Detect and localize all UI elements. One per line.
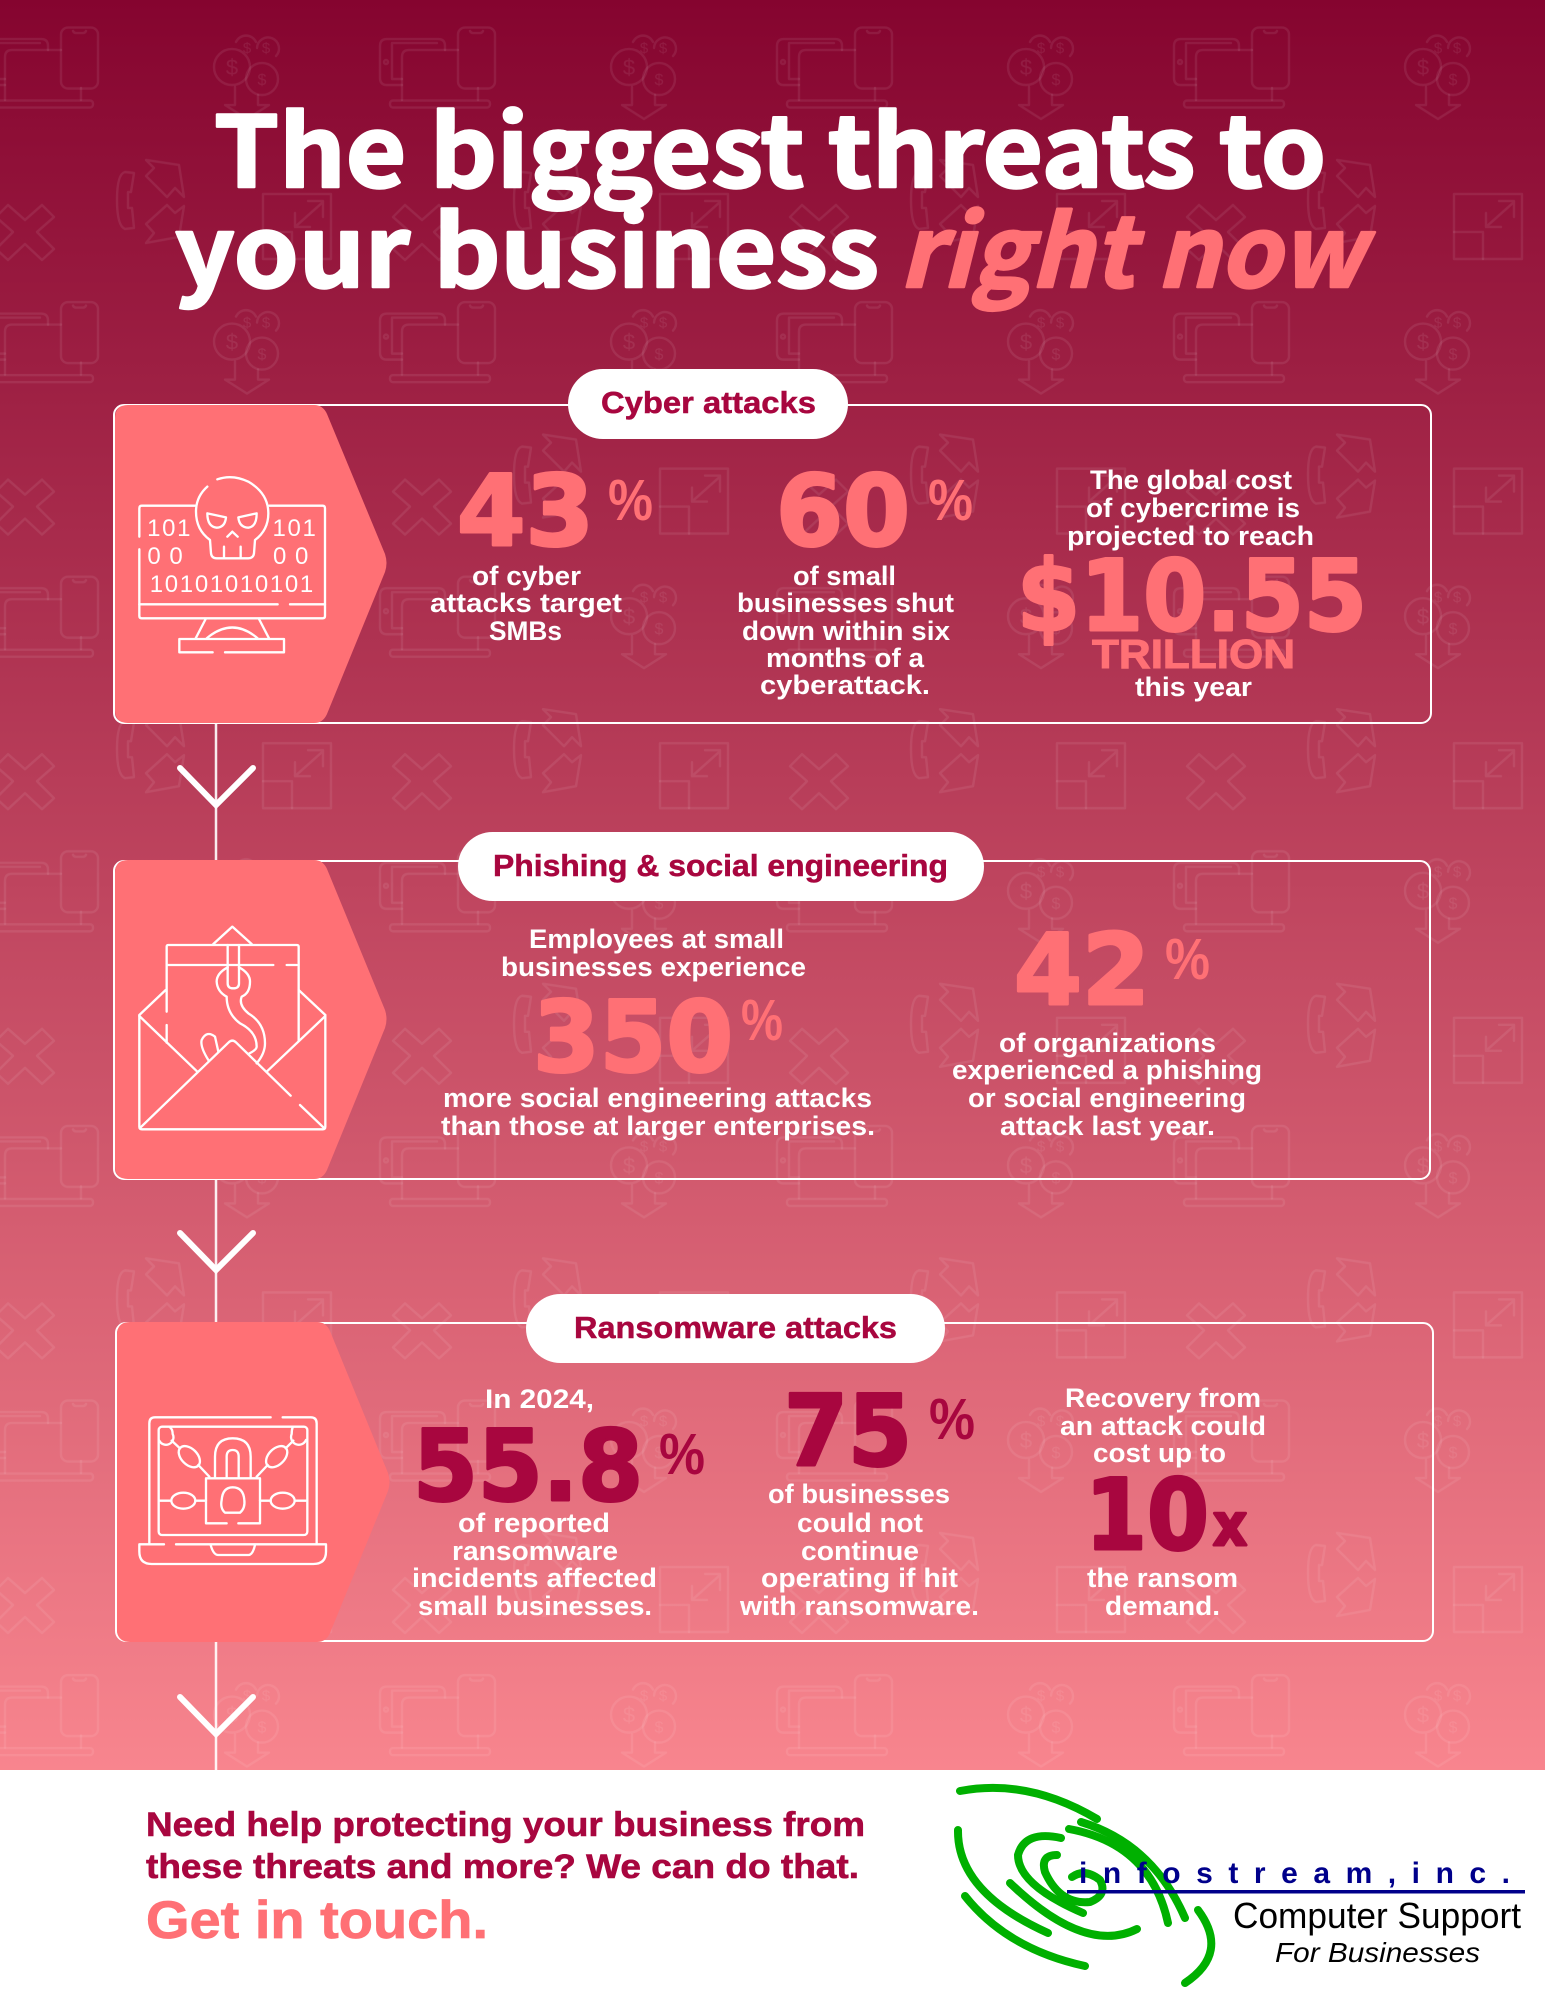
stat: 10x: an attack could	[1060, 1411, 1266, 1441]
icon: skull on computer monitor: 101	[272, 515, 318, 542]
stat: 55.8%: of reported	[458, 1508, 610, 1538]
logo wordmark: infostream,inc.	[1079, 1857, 1510, 1890]
icon: laptop with padlock	[139, 1417, 326, 1564]
stat: $10.55 trillion: projected to reach	[1067, 521, 1314, 551]
logo tagline	[1233, 1895, 1521, 1968]
stat: 60%	[737, 455, 973, 700]
stat: 10x: Recovery from	[1065, 1383, 1261, 1413]
stat: 55.8%: small businesses.	[418, 1591, 652, 1621]
stat: 350%: businesses experience	[501, 952, 806, 982]
stat: 42%: 42	[1014, 914, 1150, 1028]
stat: 350%: %	[741, 988, 783, 1053]
stat: $10.55 trillion	[1017, 465, 1367, 702]
heading pill: Ransomware attacks	[526, 1294, 945, 1363]
stat: 75%: operating if hit	[761, 1563, 958, 1593]
stat: 350%: than those at larger enterprises.	[441, 1111, 875, 1141]
panel: ransomware attacks	[116, 1294, 1433, 1642]
call to action	[146, 1806, 865, 1950]
stat: 60%: months of a	[766, 643, 925, 673]
stat: $10.55 trillion: The global cost	[1090, 465, 1292, 495]
stat: 10x: demand.	[1105, 1591, 1220, 1621]
stat: 42%	[952, 914, 1262, 1141]
stat: 60%: cyberattack.	[760, 670, 930, 700]
coral arrow tab	[115, 405, 386, 723]
call to action: Need help protecting your business from	[146, 1806, 865, 1844]
stat: 60%: down within six	[742, 616, 950, 646]
stat: $10.55 trillion: $10.55	[1017, 540, 1367, 654]
stat: 42%: attack last year.	[1000, 1111, 1215, 1141]
stat: $10.55 trillion: TRILLION	[1092, 631, 1295, 677]
stat: 350%: Employees at small	[529, 924, 784, 954]
title: The biggest threats to	[214, 74, 1326, 216]
coral arrow tab	[115, 860, 386, 1179]
logo rule	[1067, 1890, 1525, 1894]
title: your business	[175, 174, 879, 316]
stat: 75%: of businesses	[768, 1479, 950, 1509]
icon: skull on computer monitor: 101	[147, 515, 192, 542]
stat: 55.8%: incidents affected	[412, 1563, 657, 1593]
stat: 10x: 10	[1085, 1459, 1209, 1573]
stat: 55.8%	[412, 1384, 705, 1621]
stat: 75%: continue	[801, 1536, 919, 1566]
stat: 75%	[739, 1375, 979, 1621]
logo tagline: For Businesses	[1275, 1937, 1480, 1968]
stat: 43%: 43	[457, 455, 594, 569]
stat: 55.8%: 55.8	[413, 1410, 643, 1524]
panel: phishing and social engineering	[114, 832, 1430, 1179]
call to action: Get in touch.	[146, 1891, 488, 1950]
stat: 75%: 75	[784, 1375, 912, 1489]
stat: 60%: of small	[793, 561, 896, 591]
stat: 55.8%: ransomware	[452, 1536, 618, 1566]
panel: cyber attacks	[114, 369, 1431, 723]
heading pill: Phishing and social engineering: Phishing & social engineering	[493, 848, 948, 883]
stat: 75%: %	[929, 1387, 975, 1452]
icon: skull on computer monitor: 00	[273, 543, 317, 570]
heading pill: Cyber attacks	[568, 369, 848, 439]
heading pill: Phishing and social engineering	[458, 832, 984, 901]
stat: 75%: with ransomware.	[739, 1591, 979, 1621]
stat: 350%	[441, 924, 875, 1141]
title	[175, 74, 1375, 316]
title: right now	[899, 174, 1375, 316]
icon: skull on computer monitor: 00	[147, 543, 191, 570]
heading pill: Ransomware attacks: Ransomware attacks	[574, 1310, 897, 1345]
stat: 55.8%: In 2024,	[485, 1384, 594, 1414]
logo swirl	[958, 1788, 1211, 1983]
logo tagline: Computer Support	[1233, 1895, 1521, 1936]
stat: 42%: of organizations	[999, 1028, 1216, 1058]
stat: 60%: 60	[776, 455, 910, 569]
stat: 75%: could not	[797, 1508, 923, 1538]
stat: 10x	[1060, 1383, 1266, 1621]
stat: $10.55 trillion: this year	[1135, 672, 1253, 702]
stat: 43%	[430, 455, 653, 646]
coral arrow tab	[117, 1322, 390, 1642]
stat: 10x: x	[1213, 1491, 1247, 1559]
stat: $10.55 trillion: of cybercrime is	[1086, 493, 1300, 523]
stat: 42%: experienced a phishing	[952, 1055, 1262, 1085]
stat: 10x: the ransom	[1087, 1563, 1238, 1593]
icon: skull on computer monitor	[139, 477, 325, 652]
call to action: these threats and more? We can do that.	[146, 1848, 859, 1886]
stat: 350%: 350	[533, 981, 733, 1095]
footer band	[0, 1770, 1545, 2000]
stat: 42%: or social engineering	[968, 1083, 1246, 1113]
stat: 350%: more social engineering attacks	[443, 1083, 872, 1113]
stat: 43%: %	[608, 468, 653, 533]
connector line and arrows	[180, 723, 253, 1770]
stat: 43%: attacks target	[430, 588, 622, 618]
stat: 60%: businesses shut	[737, 588, 954, 618]
stat: 43%: SMBs	[489, 616, 562, 646]
stat: 42%: %	[1165, 927, 1210, 992]
icon: skull on computer monitor: 10101010101	[150, 571, 315, 598]
stat: 43%: of cyber	[472, 561, 581, 591]
stat: 55.8%: %	[659, 1422, 705, 1487]
heading pill: Cyber attacks: Cyber attacks	[601, 385, 816, 420]
stat: 60%: %	[928, 468, 973, 533]
icon: envelope with fish hook	[139, 927, 325, 1129]
stat: 10x: cost up to	[1093, 1438, 1226, 1468]
logo: infostream inc	[958, 1788, 1525, 1983]
